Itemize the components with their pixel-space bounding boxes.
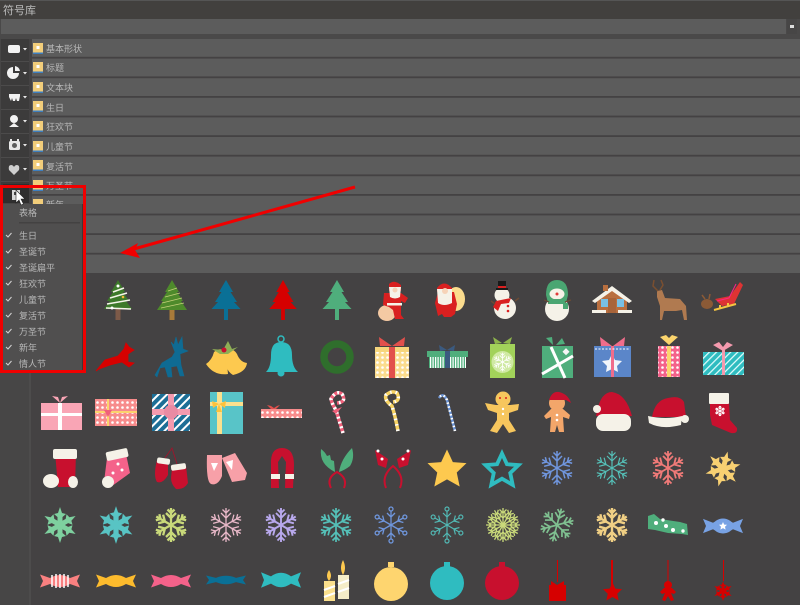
icon: gift with red bow <box>375 337 409 378</box>
icon: yellow ornament <box>374 562 408 601</box>
icon: lime snowflake gift <box>490 337 515 378</box>
icon: pink stocking <box>102 448 130 488</box>
callout: red highlight frame <box>2 186 84 372</box>
icon: teal leaf snowflake <box>96 506 136 544</box>
library category list: 复活节 <box>46 161 73 172</box>
row 2: reindeer, bell, wreath and gift boxes <box>96 335 744 378</box>
icon: candles <box>324 560 349 601</box>
icon: blue candy <box>703 518 743 534</box>
icon: decorated tree <box>104 280 132 320</box>
icon: teal gift with pink bow <box>703 342 744 375</box>
row 6: candies, candles, ornaments <box>40 560 733 601</box>
icon: red stocking <box>43 449 78 488</box>
title bar: 符号库 <box>3 4 36 17</box>
icon: golden bells <box>206 341 247 375</box>
library category list <box>32 39 800 273</box>
row 1: christmas trees and characters <box>104 280 743 321</box>
icon: blue ring snowflake <box>373 507 409 543</box>
icon: red stocking with snowflake <box>709 393 737 433</box>
icon: teal snowflake <box>595 451 629 485</box>
dropdown menu: 情人节 <box>19 358 46 369</box>
dropdown menu: 儿童节 <box>19 294 46 305</box>
library category list: 万圣节 <box>46 181 73 191</box>
icon: pie chart tab <box>7 66 20 79</box>
icon: green ribbon gift <box>542 337 573 378</box>
icon: pink mittens <box>207 453 247 484</box>
icon: yellow gingerbread man <box>485 392 519 433</box>
icon: orange gingerbread man with hat <box>544 392 571 432</box>
icon: red antlers headband <box>375 450 411 488</box>
dropdown menu <box>3 204 83 371</box>
icon: green striped gift <box>427 345 468 368</box>
icon: orange dotted gift <box>95 399 137 426</box>
icon: camera tab <box>9 139 20 150</box>
icon: heart tab <box>9 165 19 175</box>
row 5: snowflakes and candies <box>41 502 743 548</box>
library category list: 儿童节 <box>46 141 73 152</box>
icon: striped blue gift <box>152 394 190 431</box>
icon: santa hat <box>593 392 632 431</box>
icon: hanging red gingerbread <box>660 560 676 601</box>
icon: green candy <box>648 514 688 535</box>
left icon toolbar <box>0 39 31 605</box>
icon: yellow snowflake <box>700 447 746 491</box>
icon: pink candy cane <box>331 393 344 433</box>
dropdown menu: 复活节 <box>19 310 46 321</box>
icon: mint snowflake <box>41 507 79 543</box>
icon: teal branched snowflake <box>319 508 353 542</box>
icon: sleigh <box>701 282 743 310</box>
icon: snowman with hat <box>491 281 519 319</box>
icon: yellow candy cane <box>386 392 398 431</box>
dropdown carets <box>23 48 27 170</box>
icon: animals tab <box>9 94 20 101</box>
icon: yellow candy <box>96 574 136 588</box>
library category list: 新年 <box>46 199 64 210</box>
icon: coral snowflake <box>651 451 685 485</box>
icon: blue candy cane <box>439 395 455 431</box>
icon: brown reindeer <box>653 280 687 320</box>
row 3: gifts, canes, gingerbread, hats <box>41 392 737 434</box>
icon: pink snowflake <box>209 508 243 542</box>
icon: teal gift <box>210 392 243 434</box>
icon: red tree <box>269 280 297 320</box>
icon: blue star gift <box>594 337 631 377</box>
icon: yellow radial snowflake <box>480 502 526 548</box>
icon: red mittens <box>155 448 188 489</box>
row 4: winter clothes, stars, snowflakes <box>43 447 746 491</box>
icon: gold snowflake <box>595 508 629 542</box>
icon: dark teal candy <box>206 575 246 585</box>
dropdown menu: 圣诞扁平 <box>19 262 55 273</box>
icon: teal ornament <box>430 562 464 600</box>
icon: teal bell <box>266 336 298 376</box>
arrow <box>120 187 355 258</box>
library category list: 生日 <box>46 102 64 113</box>
icon: green tree <box>157 280 187 320</box>
icon: red ornament <box>485 562 519 600</box>
icon: wreath <box>324 344 350 370</box>
icon: lilac snowflake <box>264 508 298 542</box>
icon: mint tree <box>322 280 352 320</box>
icon: green snowflake <box>536 504 578 546</box>
icon: pink gift with white ribbon <box>41 396 82 430</box>
icon: hanging red star <box>603 560 622 601</box>
dropdown menu: 狂欢节 <box>19 278 46 289</box>
icon: hanging red gift <box>549 560 566 601</box>
library category list: 基本形状 <box>46 43 82 54</box>
icon: low santa hat <box>648 397 689 427</box>
icon: striped pink candy <box>40 574 80 588</box>
icon: person tab <box>9 115 19 127</box>
icon: blue snowflake <box>540 451 574 485</box>
dropdown menu: 万圣节 <box>19 327 46 337</box>
library category list: 狂欢节 <box>46 121 73 132</box>
icon: blue tree <box>212 280 240 320</box>
icon: red scarf <box>271 448 294 488</box>
icon: green antlers headband <box>321 448 353 488</box>
icon: pink candy <box>151 574 191 588</box>
icon: holiday tab <box>12 190 20 200</box>
icon: yellow star <box>428 450 466 487</box>
search bar <box>0 19 800 39</box>
icon: santa with yellow sack <box>435 284 465 317</box>
library category list: 文本块 <box>46 82 73 93</box>
dropdown menu: 生日 <box>19 230 37 241</box>
icon: lime snowflake <box>154 508 188 542</box>
icon: teal outline star <box>486 454 518 485</box>
title bar <box>0 0 800 19</box>
dropdown menu: 圣诞节 <box>19 247 46 257</box>
icon: snowman with green hood <box>544 280 571 321</box>
dropdown menu: 表格 <box>19 207 37 218</box>
icon: blue reindeer <box>155 337 188 377</box>
icon: flat pink gift <box>261 405 302 418</box>
icon: teal candy <box>261 572 301 588</box>
icon: rectangle tab <box>8 45 20 53</box>
icon: pink dotted gift <box>658 335 680 377</box>
icon: santa with sack <box>378 282 408 321</box>
icon: red leaping reindeer <box>96 343 134 371</box>
icon: teal ring snowflake <box>429 507 465 543</box>
dropdown menu: 新年 <box>19 342 37 353</box>
library category list: 标题 <box>46 62 64 73</box>
icon: cabin <box>592 285 632 313</box>
icon: mouse cursor <box>16 190 25 205</box>
icon: hanging red snowflake <box>713 560 733 601</box>
